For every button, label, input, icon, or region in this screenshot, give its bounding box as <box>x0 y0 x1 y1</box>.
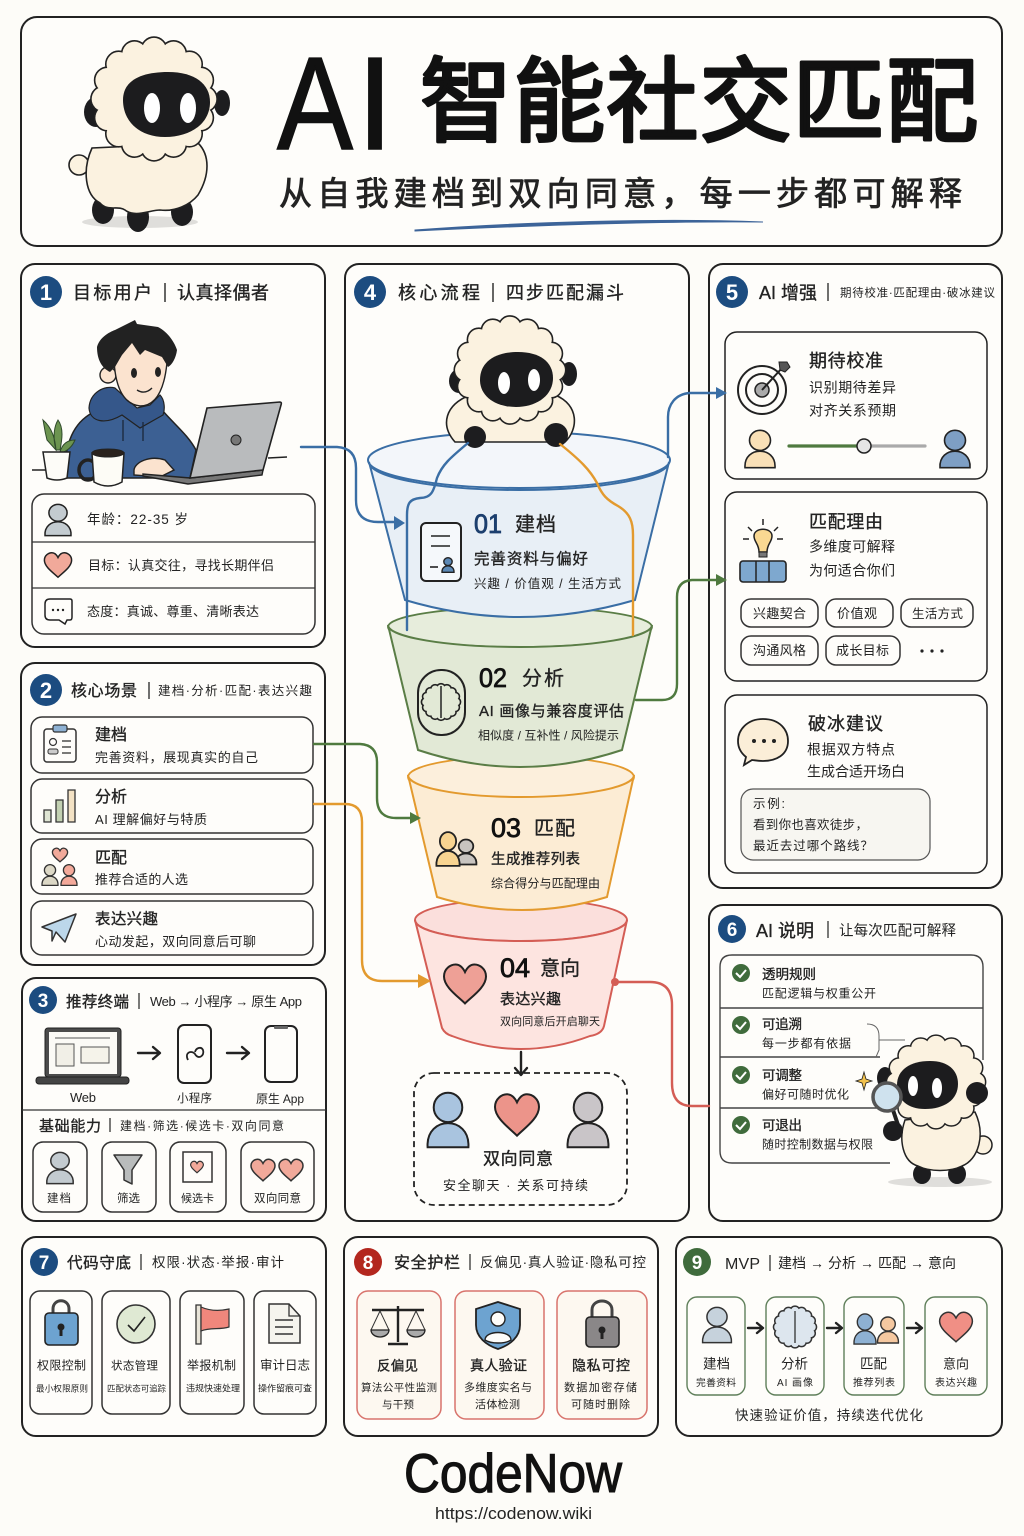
sub-heading: base capabilities: 基础能力 <box>39 1118 101 1135</box>
example quote: 示例: <box>753 797 785 811</box>
card: match reasons: 多维度可解释 <box>809 538 895 554</box>
scenario: express interest <box>31 901 313 955</box>
card: report <box>180 1291 244 1414</box>
card: ice-breaker: 根据双方特点 <box>807 742 895 758</box>
heading: AI 说明 <box>756 921 814 941</box>
funnel stage 01 profile: 完善资料与偏好 <box>474 550 588 568</box>
capability: candidate card <box>170 1142 226 1212</box>
item: transparent rules: 匹配逻辑与权重公开 <box>762 986 876 1000</box>
dashed outcome: mutual consent <box>414 1073 627 1205</box>
card: audit log: 操作留痕可查 <box>258 1382 312 1394</box>
heading: 建档·分析·匹配·表达兴趣 <box>158 683 312 698</box>
item: adjustable: 偏好可随时优化 <box>762 1086 849 1102</box>
step: analysis: 分析 <box>781 1356 808 1372</box>
funnel stage 04 intent: 04 <box>500 953 530 983</box>
row: attitude: 态度：真诚、尊重、清晰表达 <box>87 604 259 619</box>
scenario: match: 推荐合适的人选 <box>95 872 188 887</box>
connector: green analysis to reasons <box>636 574 727 700</box>
heading <box>71 682 312 700</box>
item: traceable <box>732 1016 851 1050</box>
explanation list <box>720 955 983 1163</box>
row: age <box>45 504 188 536</box>
badge 7: 7 <box>39 1253 49 1274</box>
illustration: user at laptop <box>32 320 287 486</box>
example quote <box>741 789 930 860</box>
icon: native app phone <box>256 1026 304 1106</box>
card: anti-bias <box>357 1291 441 1419</box>
card: report: 违规快速处理 <box>186 1382 240 1394</box>
funnel stage 04 intent: 意向 <box>540 957 580 980</box>
heading: 让每次匹配可解释 <box>839 922 956 940</box>
icon: mini program phone <box>177 1025 212 1105</box>
step: intent: 意向 <box>943 1356 969 1372</box>
card: anti-bias: 算法公平性监测 <box>361 1381 437 1394</box>
heading: 认真择偶者 <box>177 283 269 303</box>
funnel stage 01 profile: 兴趣 / 价值观 / 生活方式 <box>474 576 621 591</box>
step: match <box>844 1297 904 1395</box>
tags: 价值观 <box>837 606 877 621</box>
panel 3: recommendation clients <box>22 978 326 1221</box>
card: state management <box>102 1291 170 1414</box>
badge 5 <box>716 276 748 308</box>
capability: profile: 建档 <box>47 1191 71 1205</box>
heading <box>394 1254 646 1272</box>
card: match reasons: 匹配理由 <box>809 512 883 532</box>
item: opt out <box>732 1116 873 1152</box>
step: profile: 完善资料 <box>696 1376 736 1389</box>
scenario: profile: 完善资料，展现真实的自己 <box>95 750 258 765</box>
connector: blue paw to profile card <box>407 443 468 630</box>
badge 3: 3 <box>38 991 48 1012</box>
connector: red intent to explanation <box>611 978 709 1106</box>
capability: filter: 筛选 <box>117 1191 140 1205</box>
tags: 沟通风格 <box>753 643 806 658</box>
scenario: analysis: AI 理解偏好与特质 <box>95 812 207 827</box>
icon: brain <box>418 670 465 735</box>
mascot on funnel rim <box>447 317 577 448</box>
badge 3 <box>29 986 57 1014</box>
tags <box>741 599 973 665</box>
funnel stage 02 analysis: 02 <box>479 663 507 693</box>
funnel stage 03 match: 03 <box>491 813 521 843</box>
connector: blue funnel to calibration <box>668 387 727 457</box>
title panel <box>21 17 1002 246</box>
arrow: to mutual consent <box>515 1052 527 1075</box>
connector: green scenario to match <box>314 744 421 824</box>
item: adjustable <box>732 1066 849 1102</box>
panel 5: AI enhancement <box>709 264 1002 888</box>
card: ice-breaker: 生成合适开场白 <box>807 764 905 780</box>
icon: laptop: Web <box>70 1090 96 1105</box>
panel 6: AI explanation <box>709 905 1002 1221</box>
card: ice-breaker <box>725 695 987 873</box>
badge 9 <box>683 1248 711 1276</box>
card: state management: 匹配状态可追踪 <box>107 1384 167 1394</box>
panel 9: MVP <box>676 1237 1002 1436</box>
step: intent <box>925 1297 987 1395</box>
arrow <box>907 1323 922 1333</box>
scenario: express interest: 心动发起，双向同意后可聊 <box>95 934 256 949</box>
badge 9: 9 <box>692 1253 702 1274</box>
funnel stage 03 match: 综合得分与匹配理由 <box>491 876 600 890</box>
card: report: 举报机制 <box>187 1358 236 1372</box>
card: privacy: 数据加密存储 <box>564 1380 637 1394</box>
card: real person: 活体检测 <box>475 1397 520 1411</box>
funnel stage 04 intent: 双向同意后开启聊天 <box>500 1014 600 1028</box>
item: transparent rules: 透明规则 <box>762 967 816 982</box>
card: expectation calibration: 期待校准 <box>809 351 883 371</box>
funnel stage 01 profile: 01 <box>474 509 502 539</box>
dashed outcome: mutual consent: 双向同意 <box>483 1150 553 1168</box>
card: real person: 真人验证 <box>470 1358 527 1374</box>
main title: I <box>357 30 393 177</box>
card: match reasons <box>725 492 987 681</box>
main title: A <box>277 30 353 177</box>
heading <box>398 283 624 303</box>
icon: profile document <box>421 523 461 581</box>
tags: 生活方式 <box>912 606 963 621</box>
step: analysis <box>766 1297 824 1395</box>
arrow <box>827 1323 842 1333</box>
card: anti-bias: 与干预 <box>382 1399 414 1411</box>
icon: laptop <box>36 1028 129 1105</box>
card: state management: 状态管理 <box>111 1358 158 1372</box>
card: anti-bias: 反偏见 <box>377 1358 418 1374</box>
dashed outcome: mutual consent: 安全聊天 · 关系可持续 <box>443 1178 588 1193</box>
heading: 权限·状态·举报·审计 <box>152 1254 284 1270</box>
scenario: analysis <box>31 779 313 833</box>
badge 4 <box>354 276 386 308</box>
badge 1 <box>30 276 62 308</box>
badge 7 <box>30 1248 58 1276</box>
step: match: 推荐列表 <box>853 1376 895 1389</box>
subtitle: 从自我建档到双向同意，每一步都可解释 <box>279 175 962 212</box>
footer url: https://codenow.wiki <box>435 1504 592 1523</box>
badge 8 <box>354 1248 382 1276</box>
mascot with magnifier <box>856 1036 992 1187</box>
step: profile: 建档 <box>703 1356 730 1372</box>
badge 2: 2 <box>40 678 52 703</box>
heading: 推荐终端 <box>66 993 129 1011</box>
funnel stage 01 profile <box>368 432 670 617</box>
card: permissions <box>30 1291 92 1414</box>
item: adjustable: 可调整 <box>762 1068 802 1083</box>
row: age: 年龄：22-35 岁 <box>87 512 188 527</box>
capability: filter <box>102 1142 156 1212</box>
heading: AI 增强 <box>759 283 817 303</box>
heading: 核心流程 <box>398 283 480 303</box>
item: opt out: 随时控制数据与权限 <box>762 1136 873 1152</box>
card: expectation calibration: 对齐关系预期 <box>809 402 896 418</box>
example quote: 看到你也喜欢徒步， <box>753 817 868 832</box>
heading: 核心场景 <box>71 682 137 700</box>
step: intent: 表达兴趣 <box>935 1376 977 1389</box>
heading <box>67 1254 284 1272</box>
scenario: profile <box>31 717 313 773</box>
card: audit log <box>254 1291 316 1414</box>
connector: blue user to profile <box>301 447 405 530</box>
card: privacy <box>557 1291 647 1419</box>
badge 1: 1 <box>40 280 52 305</box>
heading: 反偏见·真人验证·隐私可控 <box>480 1255 646 1270</box>
step: profile <box>687 1297 745 1395</box>
funnel stage 04 intent <box>415 899 627 1049</box>
card: privacy: 隐私可控 <box>572 1358 630 1374</box>
item: traceable: 每一步都有依据 <box>762 1036 851 1050</box>
funnel stage 03 match: 匹配 <box>534 818 575 840</box>
connector: orange scenario to intent <box>314 804 431 988</box>
capability: mutual consent <box>241 1142 314 1212</box>
funnel stage 02 analysis <box>388 607 652 767</box>
funnel stage 02 analysis: 分析 <box>522 667 564 690</box>
caption: 快速验证价值，持续迭代优化 <box>735 1408 923 1423</box>
badge 6: 6 <box>727 920 737 941</box>
heading <box>756 921 956 941</box>
card: real person <box>455 1291 544 1419</box>
heading <box>73 283 269 303</box>
funnel stage 03 match <box>408 756 634 910</box>
badge 5: 5 <box>726 280 738 305</box>
sub-heading: base capabilities: 建档·筛选·候选卡·双向同意 <box>120 1118 284 1133</box>
scenario: profile: 建档 <box>95 726 127 744</box>
tags: 兴趣契合 <box>753 606 806 621</box>
panel 2: core scenarios <box>21 663 325 965</box>
icon: mini program phone: 小程序 <box>177 1091 212 1105</box>
icon: heart <box>444 965 486 1003</box>
attribute table <box>32 494 315 634</box>
heading: 代码守底 <box>67 1254 131 1272</box>
sub-heading: base capabilities <box>39 1118 284 1135</box>
funnel stage 02 analysis: AI 画像与兼容度评估 <box>479 703 624 720</box>
main title <box>277 30 978 177</box>
card: ice-breaker: 破冰建议 <box>808 714 883 734</box>
heading: 目标用户 <box>73 283 152 303</box>
card: permissions: 权限控制 <box>37 1358 86 1372</box>
step: analysis: AI 画像 <box>777 1377 813 1389</box>
card: match reasons: 为何适合你们 <box>809 562 895 578</box>
row: goal <box>44 553 274 577</box>
scenario: express interest: 表达兴趣 <box>95 910 158 928</box>
heading: 四步匹配漏斗 <box>506 283 624 303</box>
panel 4: core flow funnel <box>345 264 689 1221</box>
heading <box>759 283 996 303</box>
tags: 成长目标 <box>836 643 889 658</box>
capability: candidate card: 候选卡 <box>181 1191 214 1205</box>
footer logo: CodeNow <box>404 1442 622 1504</box>
main title: 智能社交匹配 <box>420 52 978 154</box>
step: match: 匹配 <box>860 1356 888 1372</box>
card: privacy: 可随时删除 <box>571 1397 630 1411</box>
panel 7: code baseline <box>22 1237 326 1436</box>
heading <box>66 993 302 1011</box>
heading: 建档 → 分析 → 匹配 → 意向 <box>778 1255 956 1271</box>
funnel stage 02 analysis: 相似度 / 互补性 / 风险提示 <box>478 728 619 742</box>
badge 8: 8 <box>363 1253 373 1274</box>
heading: 期待校准·匹配理由·破冰建议 <box>840 286 996 300</box>
panel 1: target users <box>21 264 325 647</box>
badge 2 <box>30 674 62 706</box>
arrow <box>227 1047 249 1059</box>
card: expectation calibration: 识别期待差异 <box>809 380 896 396</box>
funnel stage 04 intent: 表达兴趣 <box>500 991 561 1008</box>
row: goal: 目标：认真交往，寻找长期伴侣 <box>88 558 274 573</box>
item: opt out: 可退出 <box>762 1118 802 1133</box>
arrow <box>138 1047 160 1059</box>
heading: 安全护栏 <box>394 1254 460 1272</box>
panel 8: safety guardrails <box>344 1237 658 1436</box>
scenario: analysis: 分析 <box>95 788 127 806</box>
heading <box>725 1255 956 1273</box>
mascot: sheep <box>69 38 230 232</box>
connector: orange paw down <box>560 444 633 635</box>
example quote: 最近去过哪个路线？ <box>753 838 873 853</box>
icon: two people <box>436 832 476 866</box>
badge 6 <box>718 915 746 943</box>
heading: MVP <box>725 1256 760 1273</box>
scenario: match <box>31 839 313 894</box>
funnel stage 03 match: 生成推荐列表 <box>491 851 580 868</box>
badge 4: 4 <box>364 280 377 305</box>
capability: profile <box>33 1142 87 1212</box>
title underline <box>415 220 763 231</box>
item: traceable: 可追溯 <box>762 1017 802 1032</box>
card: real person: 多维度实名与 <box>464 1380 532 1394</box>
scenario: match: 匹配 <box>95 849 127 867</box>
card: expectation calibration <box>725 332 987 479</box>
item: transparent rules <box>732 964 876 1000</box>
card: permissions: 最小权限原则 <box>36 1384 88 1394</box>
heading: Web → 小程序 → 原生 App <box>150 994 302 1009</box>
funnel stage 01 profile: 建档 <box>515 513 556 536</box>
row: attitude <box>45 599 259 624</box>
arrow <box>748 1323 763 1333</box>
card: audit log: 审计日志 <box>260 1358 310 1372</box>
capability: mutual consent: 双向同意 <box>254 1191 301 1205</box>
icon: native app phone: 原生 App <box>256 1092 304 1106</box>
